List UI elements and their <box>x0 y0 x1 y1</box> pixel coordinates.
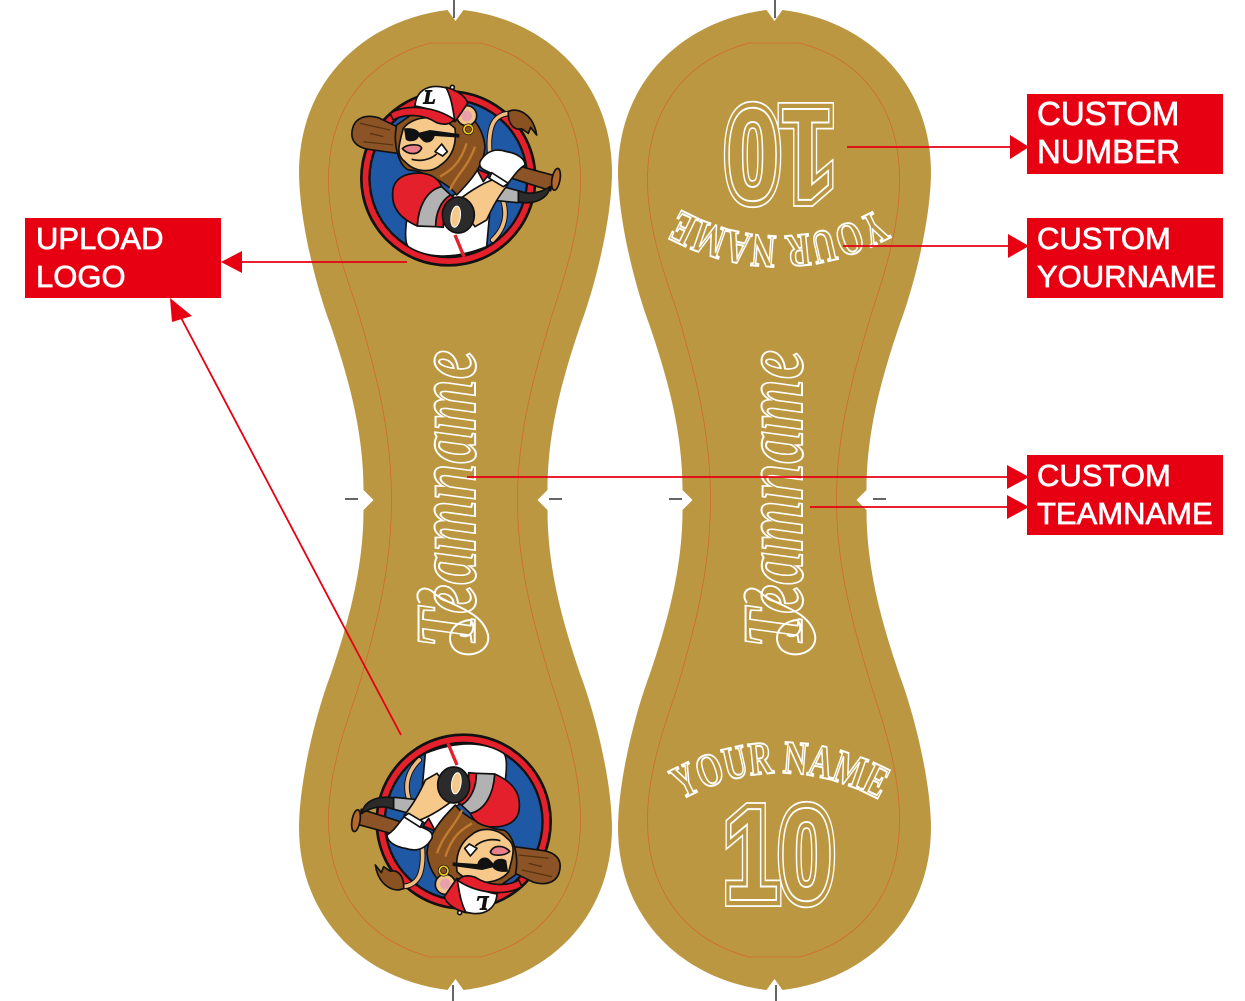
arrow: number to callout <box>847 135 1029 159</box>
number: bottom: 10 <box>724 781 834 928</box>
callout: custom teamname <box>1027 455 1223 535</box>
callout: upload logo: UPLOAD <box>36 221 163 256</box>
player name: bottom <box>666 741 892 800</box>
team name: right strap: Teamname <box>725 350 821 648</box>
callout: upload logo <box>25 218 221 298</box>
callout: upload logo: LOGO <box>36 259 126 294</box>
arrow: logo to upload logo <box>221 251 407 273</box>
callout: custom teamname: TEAMNAME <box>1037 496 1213 531</box>
panel: left strap <box>299 10 612 990</box>
callout: custom number <box>1027 94 1223 174</box>
callout: custom yourname <box>1027 218 1223 298</box>
player name: bottom: YOUR NAME <box>666 741 892 800</box>
callout: custom teamname: CUSTOM <box>1037 458 1171 493</box>
player name and number: top, rotated <box>668 81 892 268</box>
number: bottom: 10 <box>724 781 834 928</box>
number: bottom: 10 <box>724 781 834 928</box>
panel: right strap <box>618 10 931 990</box>
registration marks <box>345 0 886 1001</box>
callout: custom number: CUSTOM <box>1037 95 1179 132</box>
arrow: name to callout <box>843 234 1029 258</box>
team name: left strap: Teamname <box>398 350 494 648</box>
arrow: left team name to callout <box>467 465 1029 489</box>
callout: custom yourname: YOURNAME <box>1037 259 1216 294</box>
logo: bottom lion batter, rotated <box>350 733 560 915</box>
logo: bottom lion batter, rotated: L <box>476 892 490 914</box>
arrow: bottom logo to upload logo <box>170 298 401 735</box>
player name and number: top, rotated: 10 <box>725 81 835 228</box>
arrow: right team name to callout <box>810 495 1029 519</box>
logo: top lion batter <box>352 85 562 267</box>
callout: custom number: NUMBER <box>1037 133 1180 170</box>
logo: top lion batter: L <box>422 86 436 108</box>
player name and number: top, rotated: 10 <box>725 81 835 228</box>
player name and number: top, rotated: YOUR NAME <box>668 209 892 268</box>
player name and number: top, rotated: 10 <box>725 81 835 228</box>
callout: custom yourname: CUSTOM <box>1037 221 1171 256</box>
